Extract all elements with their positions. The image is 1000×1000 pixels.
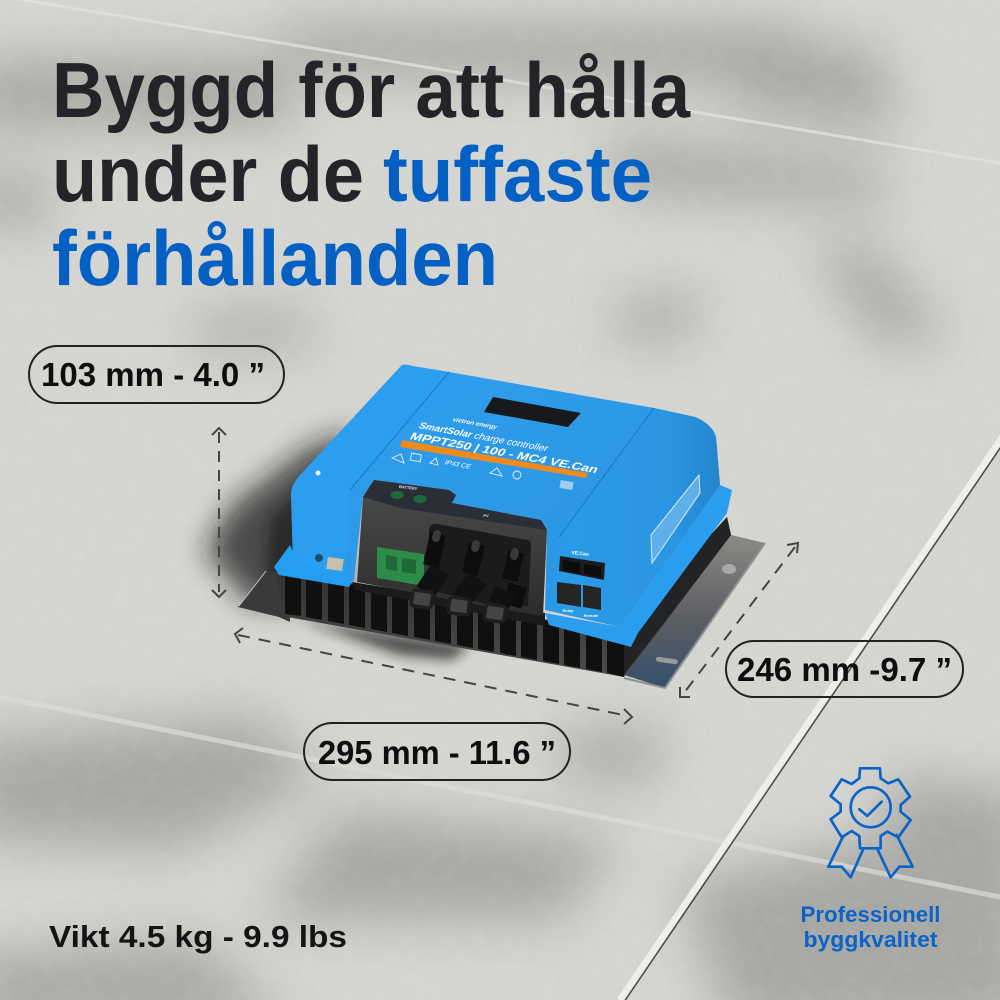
left flange — [274, 545, 354, 587]
status leds — [316, 470, 320, 476]
right flange — [545, 485, 732, 647]
qr code — [559, 480, 574, 490]
battery terminals — [390, 491, 404, 499]
label: height: 103 mm - 4.0 ” — [41, 356, 265, 393]
green terminal block — [377, 547, 424, 586]
VE.Can ports — [557, 550, 605, 618]
quality caption: byggkvalitet — [804, 927, 938, 952]
connector box — [352, 480, 547, 626]
depth dimension arrow — [680, 543, 798, 697]
product label text: victron energy — [451, 417, 499, 431]
display cover — [484, 397, 581, 427]
product: solar charge controller — [238, 365, 765, 688]
blue housing — [274, 365, 732, 647]
quality caption: Professionell — [800, 902, 940, 927]
height dimension arrow — [212, 428, 226, 597]
title: förhållanden — [52, 214, 498, 302]
title: Byggd för att hålla — [52, 46, 691, 134]
product label text: SmartSolar charge controller — [416, 421, 551, 454]
quality caption — [800, 902, 940, 952]
title: tuffaste — [383, 130, 652, 218]
VE.Can ports: Remote — [584, 613, 599, 618]
width dimension arrow — [235, 628, 632, 724]
left housing side — [291, 365, 449, 575]
right housing side — [550, 408, 720, 627]
VE.Can ports: VE.Can — [571, 550, 589, 558]
label: depth: 246 mm -9.7 ” — [737, 651, 952, 688]
weight text: Vikt 4.5 kg - 9.9 lbs — [49, 919, 347, 954]
PV recess — [429, 524, 531, 606]
connector box: BATTERY — [399, 484, 418, 491]
MC4 connectors — [411, 534, 518, 622]
connector box: PV — [483, 513, 489, 518]
product label text — [407, 417, 600, 476]
orange stripe — [400, 440, 588, 478]
heatsink fins — [277, 517, 731, 677]
housing seams — [350, 372, 654, 537]
label: depth — [726, 641, 963, 697]
product label text: MPPT250 | 100 - MC4 VE.Can — [407, 431, 600, 476]
icon: gear badge with ribbons — [828, 768, 913, 877]
title — [52, 46, 691, 302]
product label text: IP43 CE — [443, 460, 472, 470]
warning text block — [651, 475, 700, 563]
product shadow — [205, 430, 470, 660]
safety marks — [392, 453, 521, 479]
mounting plates — [238, 535, 765, 688]
VE.Can ports: Relay — [563, 608, 574, 613]
title: under de — [52, 130, 364, 218]
label: width: 295 mm - 11.6 ” — [318, 734, 556, 771]
small port — [315, 554, 344, 571]
label: width — [304, 723, 570, 780]
label: height — [29, 346, 284, 403]
